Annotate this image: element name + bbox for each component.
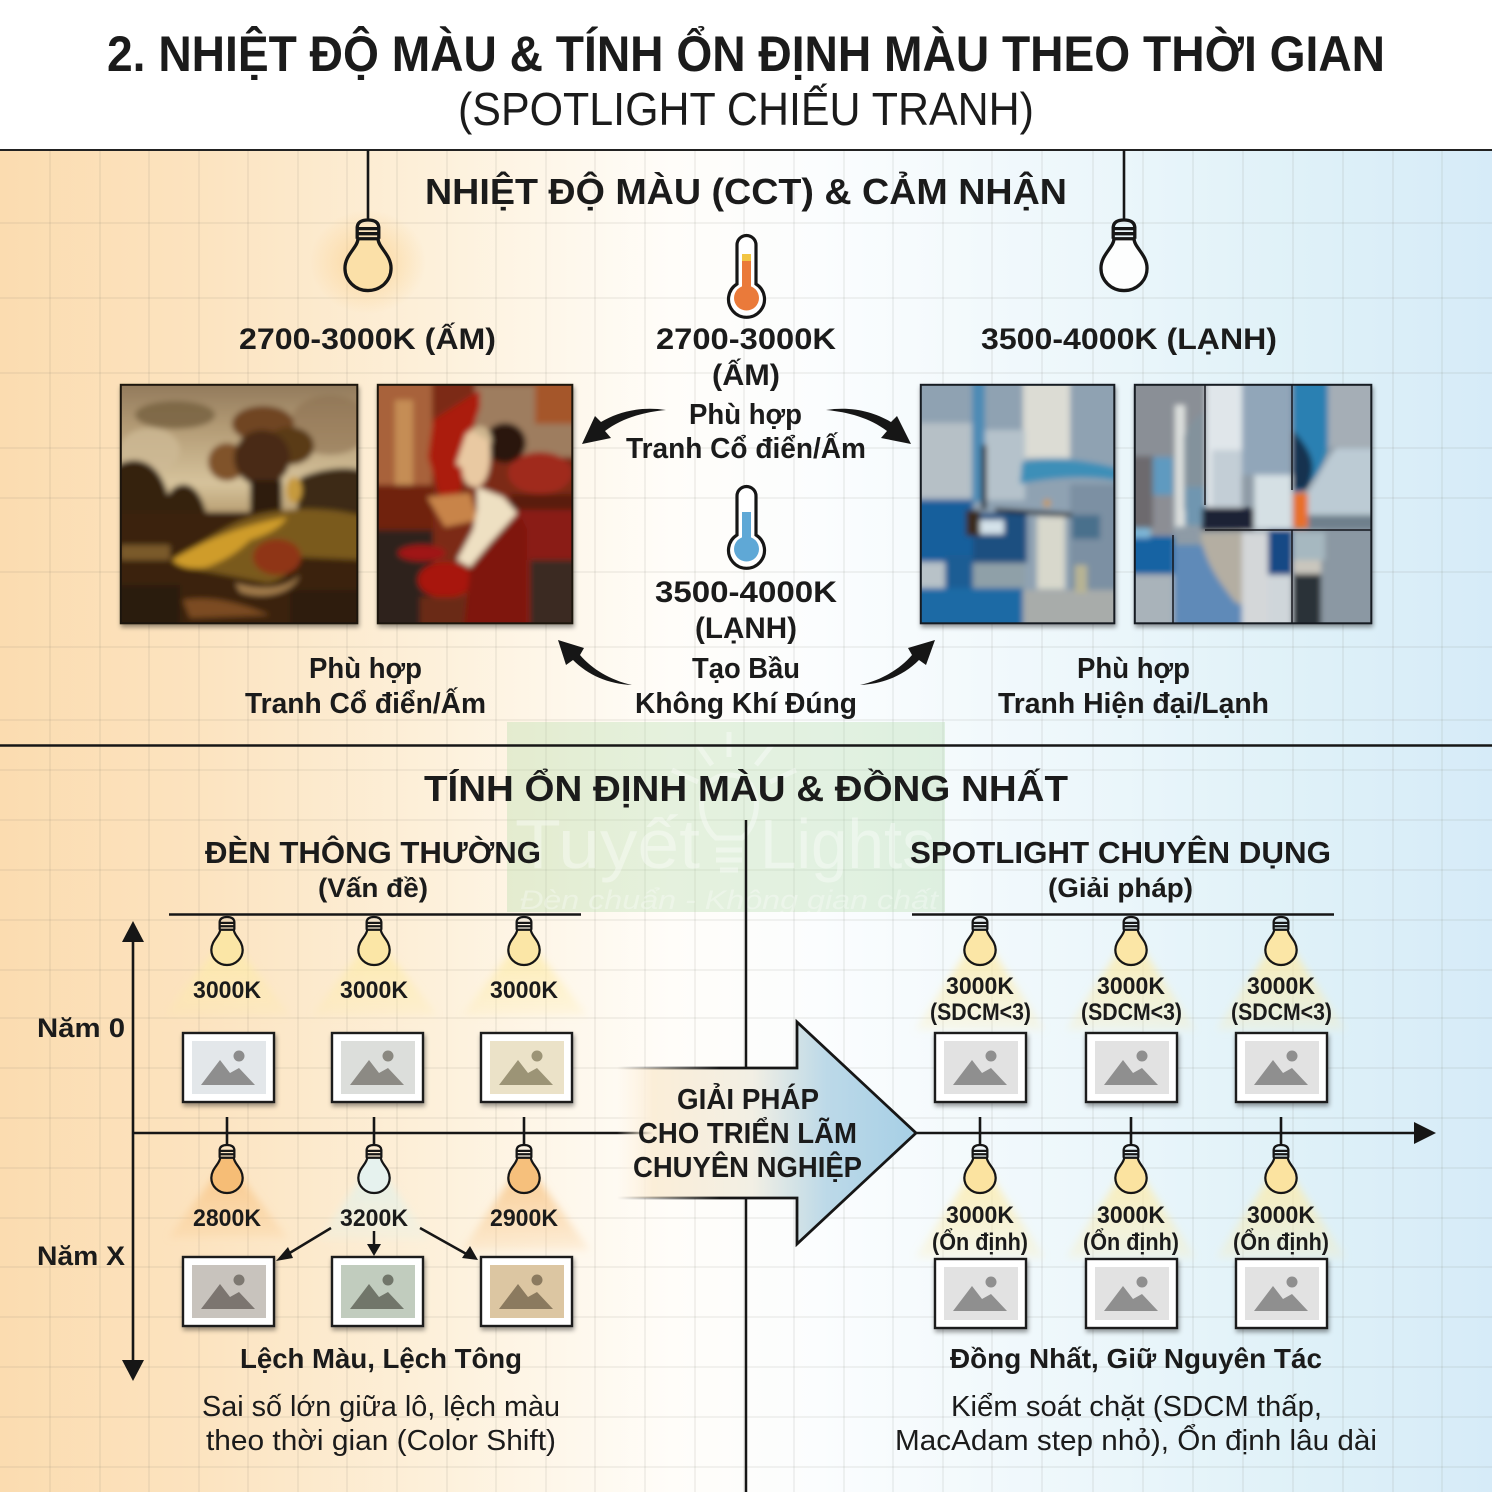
caption: modern paintings: Tranh Hiện đại/Lạnh	[998, 688, 1269, 720]
lamp: 3000K one: 3000K	[193, 977, 262, 1004]
watermark	[507, 722, 945, 915]
lamp: 3200K	[318, 1117, 430, 1240]
lamp: stable two: (Ổn định)	[1083, 1228, 1179, 1256]
frame: slight cool picture	[183, 1033, 274, 1102]
frame: stable picture two	[1086, 1259, 1177, 1328]
lamp: SDCM one: (SDCM<3)	[930, 999, 1031, 1026]
central cool text: 3500-4000K	[655, 576, 837, 609]
subtitle: (SPOTLIGHT CHIẾU TRANH)	[458, 83, 1034, 135]
icon: cool thermometer	[728, 486, 765, 568]
central arrow: professional exhibition solution: GIẢI PHÁP	[677, 1082, 819, 1116]
lamp: stable one: 3000K	[946, 1202, 1015, 1229]
label: cool range: 3500-4000K (LẠNH)	[981, 323, 1277, 356]
painting: modern abstract two	[1132, 384, 1376, 630]
icon: cool hanging bulb	[1101, 150, 1147, 291]
text block: solution summary: Đồng Nhất, Giữ Nguyên Tác	[950, 1343, 1322, 1374]
arrow: from cool text to cool paintings	[860, 640, 935, 685]
lamp: stable two	[1066, 1117, 1196, 1258]
lamp: 3000K two	[312, 917, 437, 1015]
arrow: to cool paintings	[826, 409, 911, 444]
central cool text: (LẠNH)	[695, 612, 797, 645]
frame: gallery picture three	[1236, 1033, 1327, 1102]
dedicated spotlights year 0	[915, 917, 1346, 1102]
watermark: Tuyết	[515, 805, 700, 883]
frame: stable picture one	[935, 1259, 1026, 1328]
lamp: SDCM two: (SDCM<3)	[1081, 999, 1182, 1026]
lamp: SDCM one	[915, 917, 1045, 1030]
frame: neutral picture	[332, 1033, 423, 1102]
central cool text: Không Khí Đúng	[635, 688, 857, 720]
title	[107, 25, 1385, 135]
arrow: from cool text to warm paintings	[558, 640, 632, 685]
label: warm range: 2700-3000K (ẤM)	[239, 322, 496, 356]
ordinary lights year X	[168, 1117, 590, 1326]
lamp: stable three	[1216, 1117, 1346, 1258]
central warm text: Tranh Cổ điển/Ấm	[626, 431, 866, 465]
frame: stable picture three	[1236, 1259, 1327, 1328]
column heading: dedicated spotlight: (Giải pháp)	[1048, 873, 1193, 903]
column heading: dedicated spotlight	[910, 834, 1331, 903]
central warm text	[626, 323, 866, 465]
frame: gallery picture two	[1086, 1033, 1177, 1102]
dedicated spotlights year X	[915, 1117, 1346, 1328]
lamp: SDCM two: 3000K	[1097, 973, 1166, 1000]
lamp: 3200K: 3200K	[340, 1205, 409, 1232]
ordinary lights year 0	[165, 917, 587, 1102]
heading: stability: TÍNH ỔN ĐỊNH MÀU & ĐỒNG NHẤT	[424, 766, 1068, 809]
caption: classic paintings: Phù hợp	[309, 653, 422, 685]
central arrow: professional exhibition solution: CHO TRIỂN LÃM	[638, 1116, 857, 1150]
column heading: ordinary lights	[205, 834, 541, 903]
lamp: SDCM three	[1216, 917, 1346, 1030]
central arrow: professional exhibition solution: CHUYÊN NGHIỆP	[633, 1150, 862, 1184]
lamp: 2900K: 2900K	[490, 1205, 559, 1232]
lamp: SDCM three: (SDCM<3)	[1231, 999, 1332, 1026]
caption: classic paintings	[245, 653, 486, 720]
caption: modern paintings	[998, 653, 1269, 720]
caption: modern paintings: Phù hợp	[1077, 653, 1190, 685]
central warm text: 2700-3000K	[656, 323, 836, 356]
chart axes	[122, 921, 1436, 1381]
lamp: 2800K	[168, 1117, 288, 1238]
lamp: SDCM one: 3000K	[946, 973, 1015, 1000]
lamp: 2900K	[462, 1117, 590, 1250]
central warm text: Phù hợp	[689, 399, 802, 431]
watermark: Đèn chuẩn - Không gian chất	[520, 885, 940, 915]
lamp: SDCM three: 3000K	[1247, 973, 1316, 1000]
text block: solution summary	[895, 1343, 1377, 1457]
lamp: 3000K three	[462, 917, 587, 1015]
central cool text: Tạo Bầu	[692, 653, 800, 685]
icon: warm hanging bulb	[310, 150, 426, 314]
icon: warm thermometer	[728, 236, 765, 317]
lamp: 2800K: 2800K	[193, 1205, 262, 1232]
frame: greenish picture	[332, 1257, 423, 1326]
text block: problem summary	[202, 1343, 560, 1457]
heading: CCT: NHIỆT ĐỘ MÀU (CCT) & CẢM NHẬN	[425, 170, 1067, 212]
central cool text	[635, 576, 857, 720]
arrow: to warm paintings	[582, 409, 666, 444]
column heading: ordinary lights: ĐÈN THÔNG THƯỜNG	[205, 834, 541, 870]
lamp: stable three: (Ổn định)	[1233, 1228, 1329, 1256]
text block: problem summary: theo thời gian (Color Shift)	[206, 1425, 556, 1457]
panel: colour temperature and perception	[110, 150, 1383, 720]
text block: problem summary: Lệch Màu, Lệch Tông	[240, 1343, 522, 1374]
lamp: stable two: 3000K	[1097, 1202, 1166, 1229]
lamp: 3000K three: 3000K	[490, 977, 559, 1004]
frame: gallery picture one	[935, 1033, 1026, 1102]
lamp: 3000K two: 3000K	[340, 977, 409, 1004]
painting: classic landscape	[118, 384, 362, 630]
central warm text: (ẤM)	[712, 358, 780, 392]
lamp: stable one: (Ổn định)	[932, 1228, 1028, 1256]
arrows: colour deviation	[276, 1228, 478, 1261]
label: year 0: Năm 0	[37, 1013, 125, 1043]
text block: problem summary: Sai số lớn giữa lô, lệch màu	[202, 1391, 560, 1423]
lamp: stable three: 3000K	[1247, 1202, 1316, 1229]
column heading: ordinary lights: (Vấn đề)	[318, 873, 428, 903]
frame: amber picture	[481, 1257, 572, 1326]
frame: warm picture	[481, 1033, 572, 1102]
caption: classic paintings: Tranh Cổ điển/Ấm	[245, 686, 486, 720]
title: 2. NHIỆT ĐỘ MÀU & TÍNH ỔN ĐỊNH MÀU THEO THỜI GIAN	[107, 25, 1385, 82]
panel: colour stability and consistency	[37, 766, 1436, 1457]
label: year X: Năm X	[37, 1241, 125, 1271]
central arrow: professional exhibition solution	[617, 1022, 916, 1244]
watermark: Lights	[760, 805, 935, 883]
frame: greyish picture	[183, 1257, 274, 1326]
column heading: dedicated spotlight: SPOTLIGHT CHUYÊN DỤNG	[910, 834, 1331, 870]
lamp: 3000K one	[165, 917, 290, 1015]
painting: modern abstract one	[918, 384, 1120, 630]
lamp: SDCM two	[1066, 917, 1196, 1030]
text block: solution summary: MacAdam step nhỏ), Ổn định lâu dài	[895, 1423, 1377, 1457]
lamp: stable one	[915, 1117, 1045, 1258]
text block: solution summary: Kiểm soát chặt (SDCM thấp,	[951, 1391, 1322, 1423]
painting: classic portrait	[374, 384, 578, 630]
